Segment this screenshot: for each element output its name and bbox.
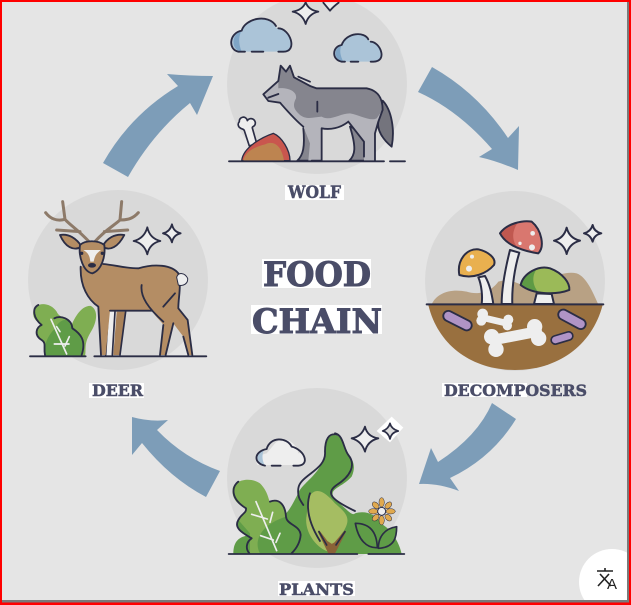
arrow: wolf to decomposers: [418, 67, 519, 170]
arrow: plants to deer: [132, 417, 220, 497]
deer label: DEER: [92, 381, 144, 400]
arrow: decomposers to plants: [419, 403, 516, 491]
plants illustration: [229, 417, 404, 554]
decomposers background circle: [425, 191, 605, 371]
title: [251, 255, 382, 342]
deer illustration: [30, 202, 206, 356]
arrow: deer to wolf: [103, 74, 213, 177]
panel: deer: [28, 190, 208, 400]
deer background circle: [28, 190, 208, 370]
title: CHAIN: [252, 302, 382, 342]
icon: translate button: [579, 549, 627, 600]
plants background circle: [227, 388, 407, 568]
panel: decomposers: [425, 191, 605, 400]
wolf illustration: [229, 2, 405, 161]
decomposers illustration: [427, 221, 603, 370]
title: FOOD: [263, 255, 371, 295]
wolf background circle: [227, 0, 407, 174]
icon: translate button: A: [607, 576, 617, 593]
wolf label: WOLF: [287, 183, 341, 203]
plants label: PLANTS: [279, 580, 354, 599]
panel: plants: [227, 388, 407, 599]
decomposers label: DECOMPOSERS: [444, 381, 587, 400]
panel: wolf: [227, 0, 407, 203]
